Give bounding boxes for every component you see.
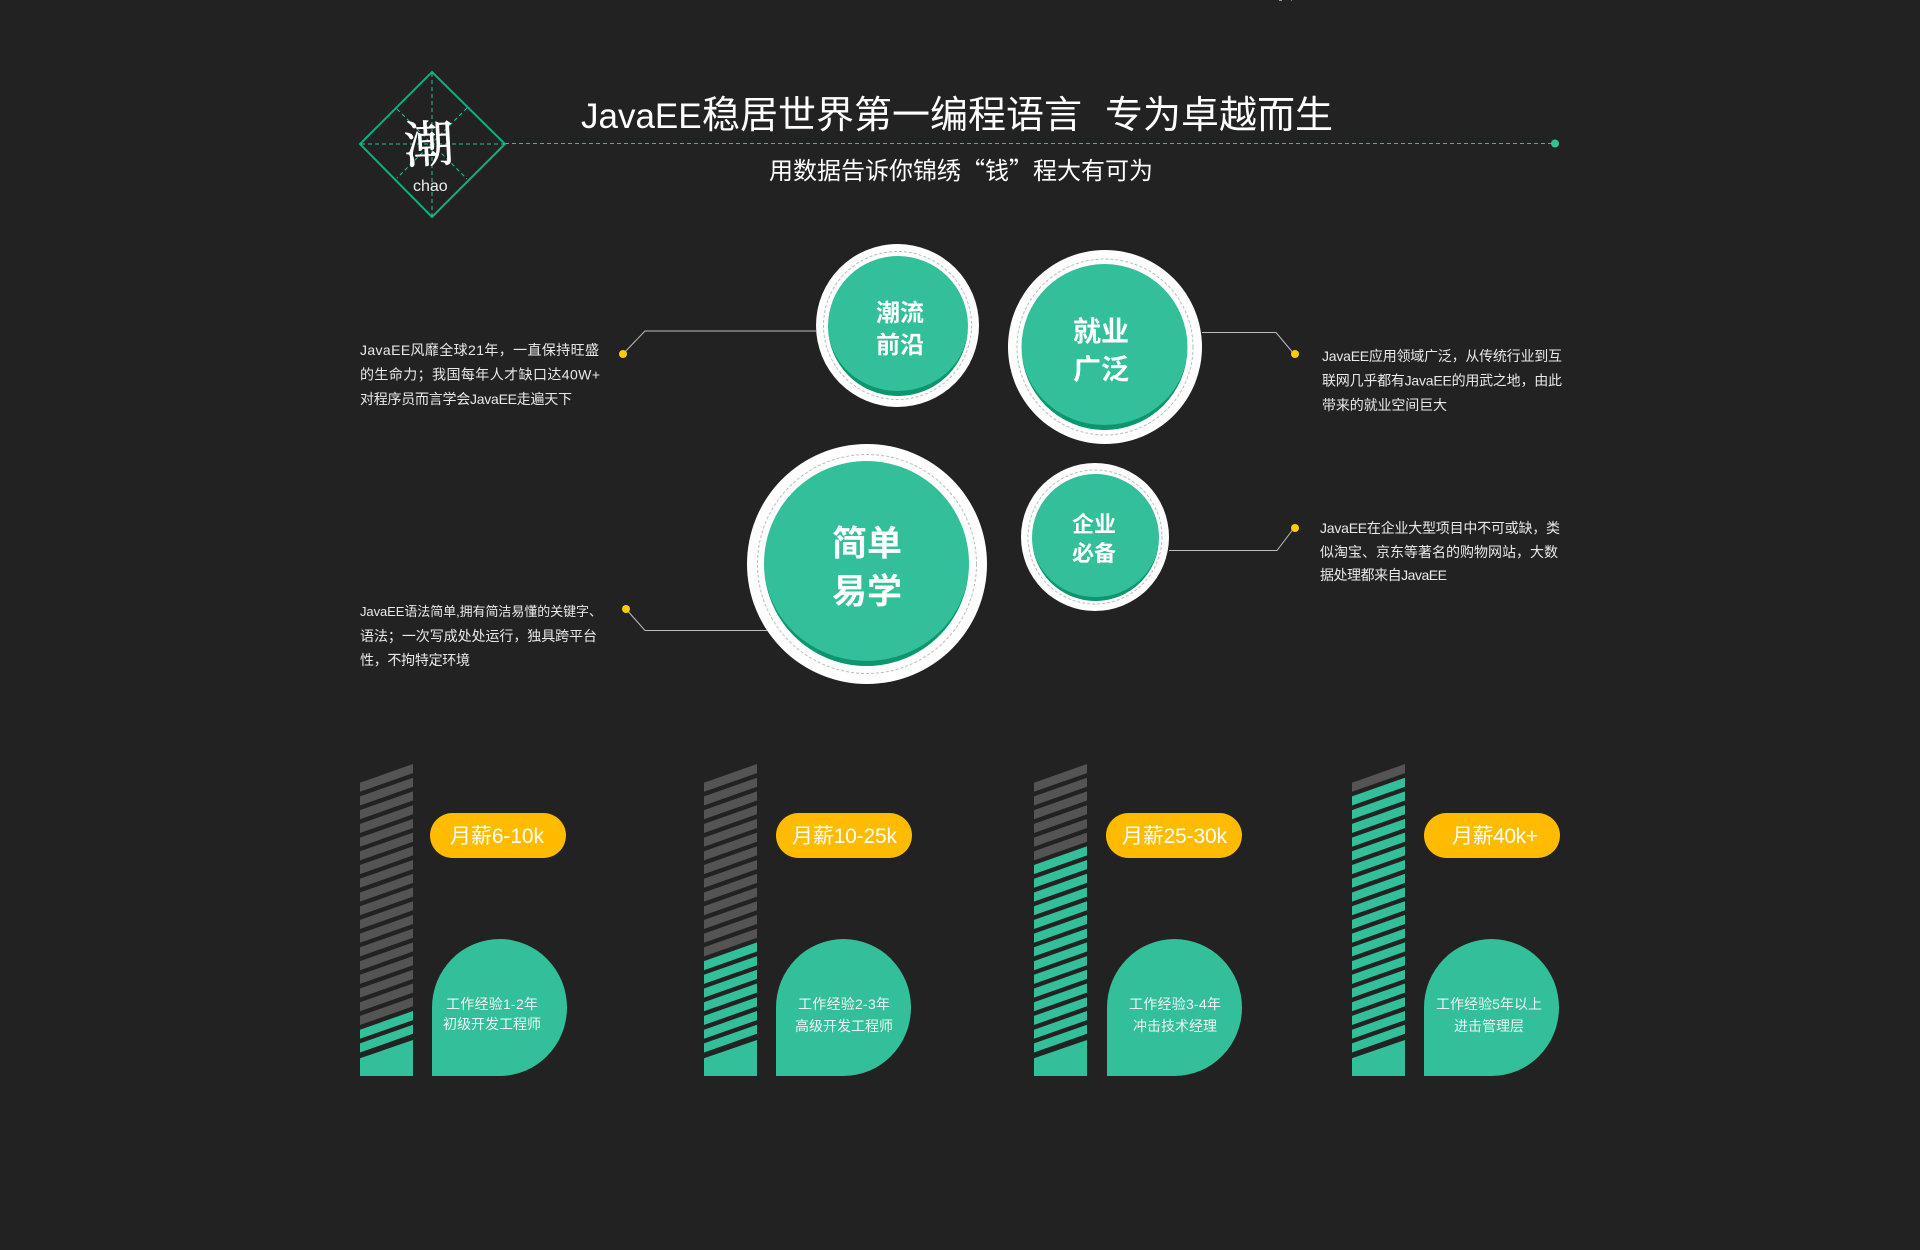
salary pill [430, 813, 566, 858]
title: JavaEE [581, 97, 702, 136]
salary pill: 月薪40k+ [1452, 825, 1538, 848]
experience blob: 高级开发工程师 [795, 1018, 893, 1034]
experience blob: 冲击技术经理 [1133, 1018, 1217, 1034]
experience blob: 初级开发工程师 [443, 1016, 541, 1032]
text: 简单易学 description [360, 604, 602, 670]
text: 潮流前沿 description: JavaEE风靡全球21年，一直保持旺盛 [360, 340, 599, 360]
salary pill: 月薪25-30k [1122, 825, 1228, 848]
experience blob [432, 939, 567, 1076]
connector: easy [622, 605, 770, 630]
text: 就业广泛 description [1322, 346, 1562, 413]
connector: enterprise [1169, 524, 1299, 550]
experience blob: 进击管理层 [1454, 1018, 1524, 1034]
text: 简单易学 description: 性，不拘特定环境 [360, 650, 470, 670]
text: 企业必备 description: JavaEE在企业大型项目中不可或缺，类 [1320, 518, 1560, 538]
salary pill [1106, 813, 1242, 858]
text: 企业必备 description [1320, 518, 1560, 583]
text: 简单易学 description: JavaEE语法简单,拥有简洁易懂的关键字、 [360, 604, 602, 619]
circle: 简单易学 [747, 444, 987, 684]
experience blob: 工作经验3-4年 [1129, 996, 1221, 1012]
salary column 2 [704, 764, 912, 1076]
logo diamond: chao [413, 178, 448, 195]
header [360, 72, 1559, 217]
salary pill: 月薪6-10k [450, 825, 544, 848]
striped bar [1034, 764, 1087, 1076]
text: 潮流前沿 description: 的生命力；我国每年人才缺口达40W+ [360, 364, 600, 384]
circle: 潮流前沿: 潮流 [876, 300, 924, 327]
title: 稳居世界第一编程语言 [702, 95, 1082, 137]
circle: 就业广泛: 就业 [1073, 316, 1129, 347]
experience blob: 工作经验1-2年 [446, 996, 538, 1012]
salary column 3 [1034, 764, 1242, 1076]
circle: 潮流前沿 [816, 244, 979, 407]
salary column 1 [360, 764, 567, 1076]
text: 就业广泛 description: 联网几乎都有JavaEE的用武之地，由此 [1322, 370, 1562, 390]
circle: 企业必备: 企业 [1072, 512, 1116, 537]
circle: 企业必备: 必备 [1072, 541, 1116, 566]
circle: 简单易学: 易学 [832, 572, 902, 612]
subtitle: 用数据告诉你锦绣“钱”程大有可为 [769, 151, 1153, 186]
text: 企业必备 description: 据处理都来自JavaEE [1320, 567, 1447, 583]
text: 潮流前沿 description: 对程序员而言学会JavaEE走遍天下 [360, 391, 572, 407]
title: 专为卓越而生 [1105, 95, 1333, 137]
experience blob: 工作经验2-3年 [798, 996, 890, 1012]
text: 就业广泛 description: 带来的就业空间巨大 [1322, 397, 1447, 413]
experience blob [776, 939, 911, 1076]
logo diamond [360, 72, 505, 217]
salary pill [1424, 813, 1560, 858]
circle: 简单易学: 简单 [832, 524, 902, 564]
experience blob: 工作经验5年以上 [1436, 996, 1542, 1012]
connector: employment [1202, 332, 1299, 358]
text: 就业广泛 description: JavaEE应用领域广泛，从传统行业到互 [1322, 346, 1562, 366]
striped bar [1352, 764, 1405, 1076]
experience blob [1424, 939, 1559, 1076]
text: 企业必备 description: 似淘宝、京东等著名的购物网站，大数 [1320, 542, 1558, 562]
circle: 就业广泛: 广泛 [1073, 354, 1129, 385]
salary column 4 [1352, 764, 1560, 1076]
experience blob [1107, 939, 1242, 1076]
connector: trend [619, 331, 816, 358]
logo diamond: 潮 [402, 104, 456, 178]
salary pill: 月薪10-25k [792, 825, 898, 848]
circle: 企业必备 [1021, 463, 1169, 611]
striped bar [704, 764, 757, 1076]
text: 潮流前沿 description [360, 340, 600, 407]
salary pill [776, 813, 912, 858]
text: 简单易学 description: 语法；一次写成处处运行，独具跨平台 [360, 626, 597, 646]
circle: 潮流前沿: 前沿 [876, 332, 924, 359]
circle: 就业广泛 [1008, 250, 1202, 444]
striped bar [360, 764, 413, 1076]
header divider with dot [505, 140, 1559, 148]
